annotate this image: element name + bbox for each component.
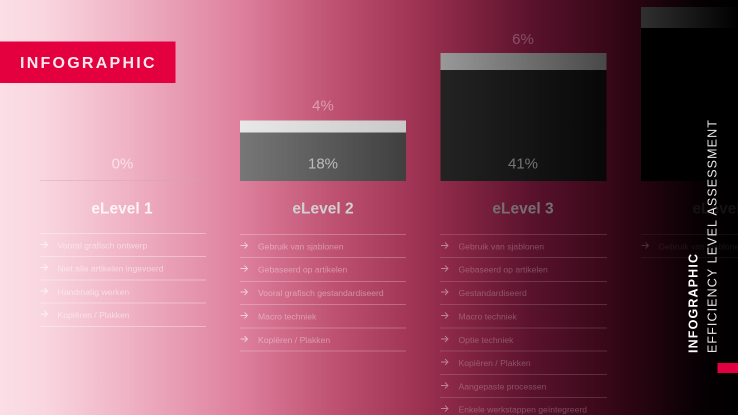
- list eLevel 2: [240, 234, 406, 352]
- list eLevel 3: Optie techniek: [458, 335, 514, 345]
- list eLevel 2: Macro techniek: [258, 312, 317, 322]
- column: eLevel 2: [240, 98, 406, 352]
- percentage 4%: 4%: [312, 98, 334, 114]
- list eLevel 3: Enkele werkstappen geïntegreerd: [458, 404, 587, 414]
- list eLevel 2: Gebruik van sjablonen: [258, 242, 344, 252]
- list eLevel 1: [40, 233, 206, 327]
- percentage 18%: 18%: [308, 156, 338, 172]
- list eLevel 1: Vooral grafisch ontwerp: [58, 240, 148, 250]
- red accent block: [718, 363, 738, 373]
- list eLevel 3: Gebruik van sjablonen: [458, 242, 544, 252]
- list eLevel 1: Handmatig werken: [58, 287, 129, 297]
- list eLevel 3: Gestandardiseerd: [458, 288, 527, 298]
- percentage 0%: 0%: [112, 156, 133, 172]
- list eLevel 1: Kopiëren / Plakken: [58, 310, 130, 320]
- heading eLevel 2: eLevel 2: [292, 200, 354, 218]
- column: eLevel 3: [440, 31, 607, 414]
- title badge: [0, 42, 176, 83]
- bar segment main: [641, 28, 738, 181]
- list eLevel 4: [641, 234, 738, 258]
- heading eLevel 1: eLevel 1: [91, 200, 153, 218]
- column: eLevel 4: [641, 7, 738, 258]
- bar segment top: [641, 7, 738, 28]
- side subtitle: EFFICIENCY LEVEL ASSESSMENT: [706, 119, 720, 353]
- list eLevel 3: Gebaseerd op artikelen: [458, 264, 548, 274]
- bar segment 6%: [440, 53, 606, 70]
- list eLevel 2: Kopiëren / Plakken: [258, 335, 330, 345]
- list eLevel 2: Vooral grafisch gestandardiseerd: [258, 288, 384, 298]
- column: eLevel 1: [40, 156, 206, 327]
- list eLevel 3: [440, 234, 607, 414]
- percentage 6%: 6%: [512, 31, 534, 48]
- list eLevel 3: Macro techniek: [458, 312, 517, 322]
- bar segment 18%: [240, 132, 406, 181]
- percentage 41%: 41%: [508, 156, 538, 172]
- bar segment 4%: [240, 120, 406, 132]
- heading eLevel 3: eLevel 3: [492, 200, 554, 218]
- list eLevel 3: Aangepaste processen: [458, 382, 547, 392]
- list eLevel 1: Niet alle artikelen ingevoerd: [58, 264, 164, 274]
- side title bold: INFOGRAPHIC: [686, 253, 700, 353]
- list eLevel 2: Gebaseerd op artikelen: [258, 264, 348, 274]
- list eLevel 3: Kopiëren / Plakken: [458, 358, 531, 368]
- side title: [686, 119, 720, 353]
- bar segment 41%: [440, 70, 606, 181]
- title: INFOGRAPHIC: [20, 55, 157, 72]
